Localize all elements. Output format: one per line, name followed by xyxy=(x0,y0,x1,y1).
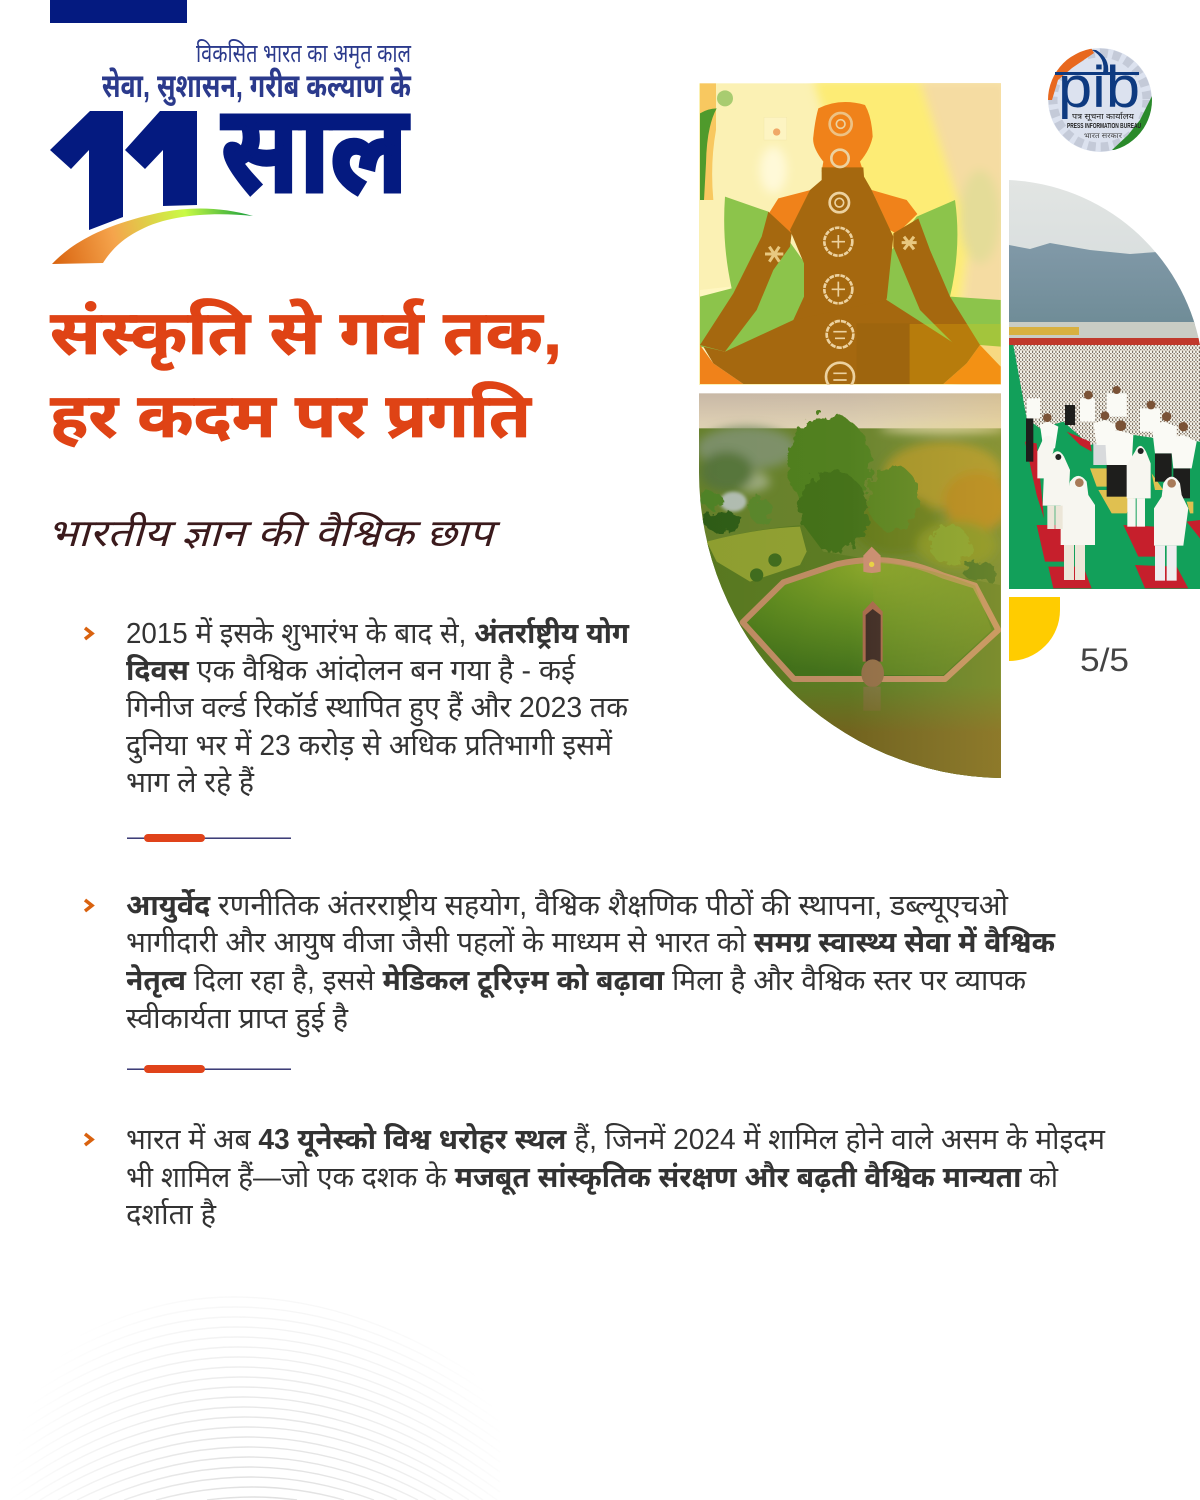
bullet 3 text: भी शामिल हैं—जो एक दशक के मजबूत सांस्कृतिक संरक्षण और बढ़ती वैश्विक मान्यता को xyxy=(126,1161,1058,1195)
tricolour swoosh xyxy=(52,209,253,264)
title: हर कदम पर प्रगति xyxy=(50,381,533,451)
bullet 1 text: 2015 में इसके शुभारंभ के बाद से, अंतर्राष्ट्रीय योग xyxy=(126,617,630,651)
logo Hindi caption bottom: भारत सरकार xyxy=(1084,133,1122,140)
title xyxy=(50,297,562,451)
bullet 1 text: गिनीज वर्ल्ड रिकॉर्ड स्थापित हुए हैं और 2023 तक xyxy=(126,691,629,727)
bullet 2 text: स्वीकार्यता प्राप्त हुई है xyxy=(126,1002,349,1038)
mats xyxy=(1025,432,1200,588)
word साल: साल xyxy=(221,81,410,219)
small shrine xyxy=(863,547,881,573)
photo: Moidam burial mound, Assam xyxy=(697,393,1010,780)
bullet 2 text xyxy=(126,889,1056,1038)
chakra symbols xyxy=(824,113,854,391)
bullet 1 text: दुनिया भर में 23 करोड़ से अधिक प्रतिभागी इसमें xyxy=(126,729,613,764)
bullet 3 text: भारत में अब 43 यूनेस्को विश्व धरोहर स्थल हैं, जिनमें 2024 में शामिल होने वाले असम के मोइदम xyxy=(126,1122,1106,1157)
numeral 11 xyxy=(50,111,197,230)
bullet 2 text: नेतृत्व दिला रहा है, इससे मेडिकल टूरिज़्म को बढ़ावा मिला है और वैश्विक स्तर पर व्यापक xyxy=(126,963,1027,998)
green lotus petals xyxy=(700,197,1001,352)
stone octagon and grass mound xyxy=(743,560,998,679)
logo tagline: विकसित भारत का अमृत काल xyxy=(196,38,411,69)
bullet 2 text: आयुर्वेद रणनीतिक अंतरराष्ट्रीय सहयोग, वैश्विक शैक्षणिक पीठों की स्थापना, डब्ल्यूएचओ xyxy=(126,889,1009,923)
campaign logo: 11 साल xyxy=(50,38,411,264)
bullet 2 text: भागीदारी और आयुष वीजा जैसी पहलों के माध्यम से भारत को समग्र स्वास्थ्य सेवा में वैश्विक xyxy=(126,925,1056,960)
photo: yoga chakra illustration xyxy=(699,80,1007,391)
logo English caption: PRESS INFORMATION BUREAU xyxy=(1067,123,1141,130)
logo disc with tricolour xyxy=(1048,46,1154,152)
foreground lawn xyxy=(699,525,1000,780)
seated body silhouette xyxy=(700,167,980,384)
bullet 1: international yoga day xyxy=(85,617,630,799)
top accent bar xyxy=(50,0,187,23)
central trees xyxy=(701,415,997,582)
background line pattern xyxy=(61,1309,463,1500)
men in white shirts and dark trousers xyxy=(1026,405,1190,498)
divider 2 xyxy=(127,1065,291,1073)
back crowd xyxy=(1013,345,1200,445)
chevron icon xyxy=(85,900,92,911)
logo Hindi caption top: पत्र सूचना कार्यालय xyxy=(1072,111,1134,122)
mound entrance xyxy=(861,601,884,711)
subtitle: भारतीय ज्ञान की वैश्विक छाप xyxy=(47,511,502,555)
ground xyxy=(1009,345,1200,589)
bullet 3 text xyxy=(126,1122,1106,1231)
title: संस्कृति से गर्व तक, xyxy=(50,297,562,371)
bullet 1 text: दिवस एक वैश्विक आंदोलन बन गया है - कई xyxy=(126,654,576,687)
forest backdrop xyxy=(697,424,1010,568)
bullet 2: ayurveda xyxy=(85,889,1056,1038)
bullet 3 text: दर्शाता है xyxy=(126,1198,217,1231)
women in white with head scarves xyxy=(1037,436,1188,581)
yellow quarter shape xyxy=(1009,597,1060,661)
page number: 5/5 xyxy=(1080,642,1129,678)
bullet 3: UNESCO heritage sites xyxy=(85,1122,1106,1231)
bullet 1 text xyxy=(126,617,630,799)
chevron icon xyxy=(85,628,92,639)
lake and stage xyxy=(1009,322,1200,340)
bullet 1 text: भाग ले रहे हैं xyxy=(126,766,255,799)
mountains xyxy=(1009,243,1200,325)
arm flower marks xyxy=(765,237,917,262)
PIB logo xyxy=(1048,46,1154,152)
pib wordmark: pib xyxy=(1058,55,1140,120)
logo subtitle: सेवा, सुशासन, गरीब कल्याण के xyxy=(102,66,411,107)
orange head and shoulders xyxy=(700,102,1001,384)
chevron icon xyxy=(85,1134,92,1145)
photo: mass yoga session xyxy=(1009,180,1200,589)
divider 1 xyxy=(127,834,291,842)
